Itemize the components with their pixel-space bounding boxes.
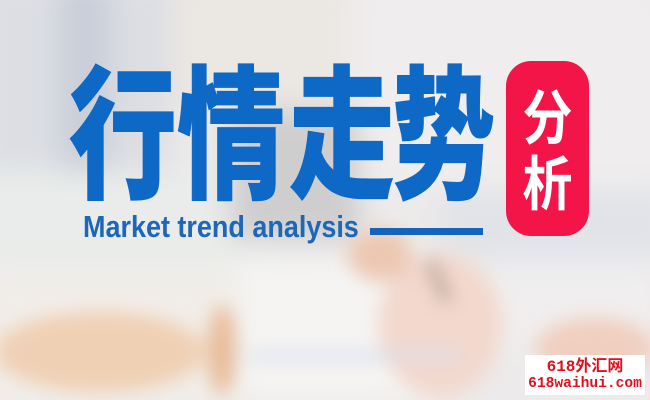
badge: 分析 — [506, 61, 589, 236]
title: 行情走势 — [69, 20, 495, 229]
subtitle: Market trend analysis: Market trend analysis — [83, 209, 359, 244]
watermark line 1: 618外汇网 — [547, 358, 623, 376]
title character 走: 走 — [289, 20, 395, 229]
badge character 析: 析 — [522, 138, 572, 222]
watermark line 2: 618waihui.com — [528, 376, 642, 392]
title character 行: 行 — [69, 20, 177, 229]
title character 情: 情 — [177, 20, 285, 229]
title character 势: 势 — [392, 20, 495, 229]
watermark — [525, 355, 645, 395]
badge character 分: 分 — [522, 72, 572, 156]
subtitle rule — [370, 228, 483, 235]
